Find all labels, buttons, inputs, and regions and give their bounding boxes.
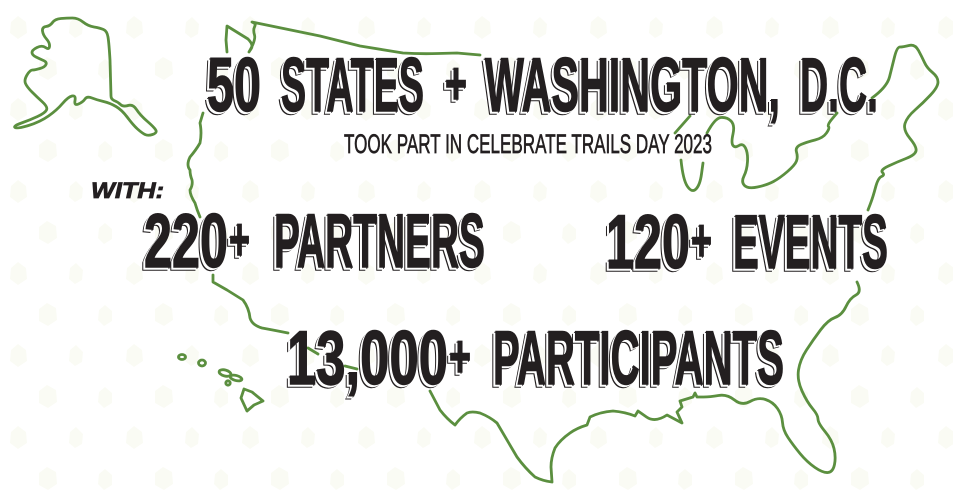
heading: 50 states + Washington, D.C.: STATES <box>281 43 424 128</box>
stat: 220+ partners: 220 <box>144 199 228 284</box>
stat: 220+ partners <box>144 199 485 284</box>
stat: 120+ events: 120 <box>606 200 690 285</box>
map: Alaska <box>15 18 156 135</box>
stat: 13,000+ participants: + <box>449 323 471 390</box>
heading: 50 states + Washington, D.C.: D.C. <box>800 43 878 128</box>
stat: 120+ events <box>606 200 888 285</box>
map: Hawaii <box>178 354 263 411</box>
heading: 50 states + Washington, D.C. <box>207 43 878 128</box>
label: with: WITH: <box>91 178 164 203</box>
stat: 120+ events: + <box>691 207 712 274</box>
stat: 220+ partners: PARTNERS <box>274 199 485 284</box>
subheading: TOOK PART IN CELEBRATE TRAILS DAY 2023 <box>344 129 712 159</box>
heading: 50 states + Washington, D.C.: 50 <box>207 43 261 128</box>
stat: 220+ partners: + <box>229 206 250 273</box>
stat: 13,000+ participants <box>287 316 784 401</box>
heading: 50 states + Washington, D.C.: + <box>445 50 467 117</box>
map: contiguous states <box>188 22 938 482</box>
stat: 13,000+ participants: 13,000 <box>287 316 448 401</box>
